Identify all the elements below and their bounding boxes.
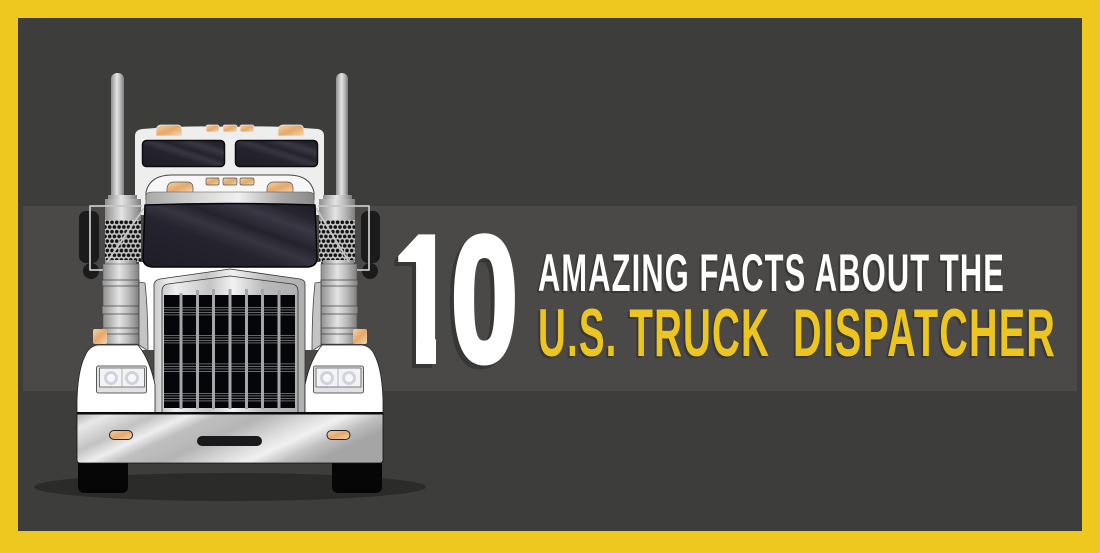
- grille shroud: [154, 269, 305, 413]
- roof marker lights: [156, 125, 304, 136]
- cab arch: [146, 175, 314, 200]
- sleeper windows: [142, 140, 318, 166]
- number shadow: 1: [389, 203, 449, 403]
- right exhaust stack: [319, 73, 358, 344]
- heading line 2: U.S. TRUCK: [536, 297, 768, 373]
- left headlight: [96, 366, 146, 393]
- right headlight: [314, 366, 364, 393]
- number face: 1: [393, 199, 453, 399]
- right fender: [305, 345, 383, 413]
- upper cab: [135, 126, 324, 215]
- wheels: [78, 455, 382, 493]
- grille black: [164, 295, 295, 408]
- horizontal title band: [23, 206, 1077, 391]
- bumper: [77, 413, 383, 463]
- truck illustration: [34, 73, 426, 501]
- grille inner frame: [162, 276, 298, 414]
- title number 10: [394, 233, 515, 370]
- visor marker lights: [167, 178, 293, 193]
- splash guards: [139, 282, 321, 351]
- ground shadow: [34, 473, 426, 501]
- heading line 2: U.S. TRUCK: [538, 295, 770, 371]
- bumper amber lights: [110, 430, 350, 440]
- mirror brackets: [90, 206, 369, 270]
- number shadow: 0: [447, 203, 514, 403]
- grille vertical bars: [180, 289, 280, 409]
- bumper slot: [197, 436, 262, 446]
- grille horizontal lines: [164, 307, 295, 401]
- left exhaust stack: [102, 73, 141, 344]
- sun visor: [146, 192, 314, 206]
- corner amber lights: [93, 329, 367, 344]
- hood and cab body: [139, 262, 321, 350]
- number shadow: [394, 238, 498, 370]
- number face: 0: [451, 199, 518, 399]
- side mirrors: [79, 211, 380, 279]
- windshield: [143, 204, 317, 267]
- left fender: [77, 345, 155, 413]
- number face: [398, 233, 515, 366]
